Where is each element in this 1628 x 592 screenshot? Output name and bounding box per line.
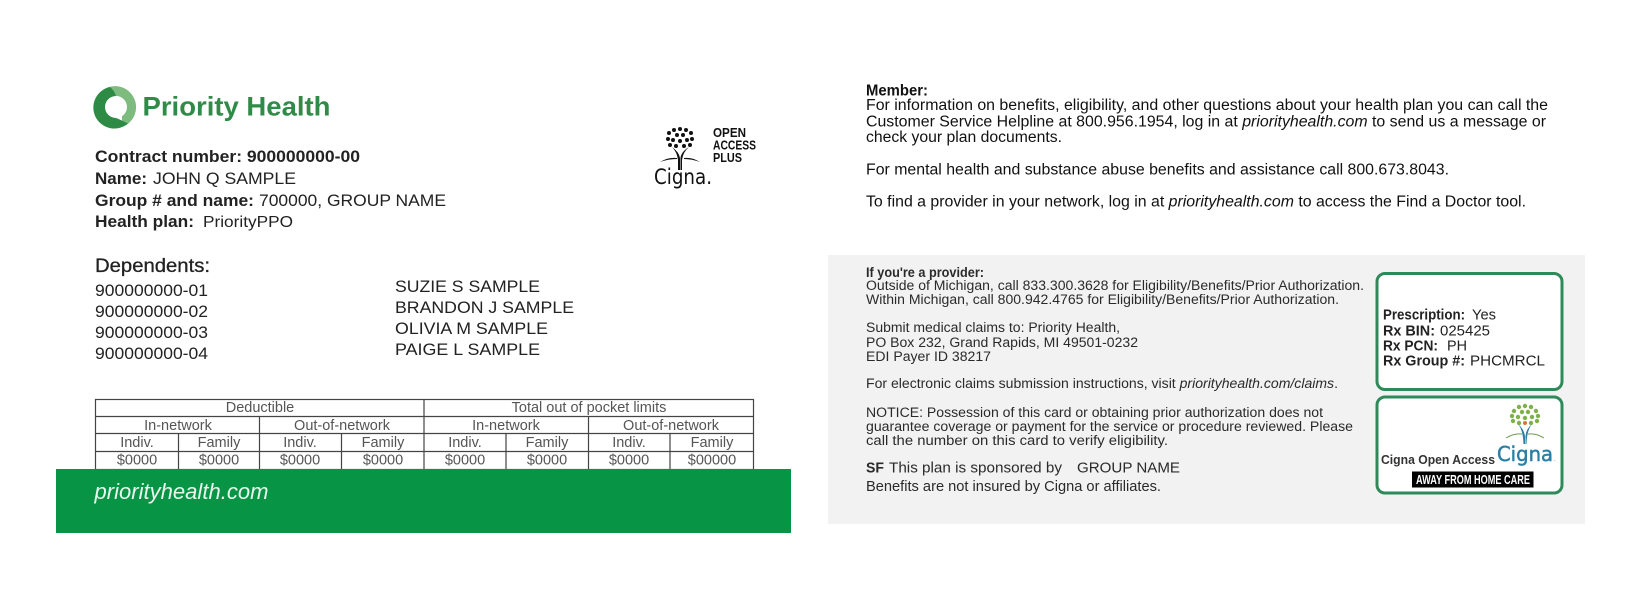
table: deductible and out of pocket limits: Family	[691, 435, 734, 451]
table: deductible and out of pocket limits: Deductible	[226, 400, 294, 416]
table: deductible and out of pocket limits: $0000	[199, 452, 239, 468]
label: away from home care	[1412, 472, 1534, 488]
table: deductible and out of pocket limits: Out-of-network	[623, 418, 720, 434]
label: away from home care: AWAY FROM HOME CARE	[1416, 472, 1530, 487]
table: deductible and out of pocket limits: $0000	[527, 452, 567, 468]
panel: Cigna Open Access box: .	[1554, 457, 1556, 463]
panel: prescription box: PHCMRCL	[1470, 354, 1545, 370]
member details: 700000, GROUP NAME	[259, 191, 446, 210]
table: deductible and out of pocket limits: $0000	[117, 452, 157, 468]
table: deductible and out of pocket limits: In-network	[472, 418, 541, 434]
panel: Cigna Open Access box: Cigna Open Access	[1381, 452, 1495, 467]
table: deductible and out of pocket limits: Indiv.	[448, 435, 482, 451]
panel: prescription box: Rx PCN:	[1383, 338, 1438, 354]
dependents list: 900000000-03	[95, 324, 208, 342]
logo: Priority Health	[93, 86, 330, 129]
member details: Group # and name:	[95, 191, 254, 210]
table: deductible and out of pocket limits: Indiv.	[283, 435, 317, 451]
table: deductible and out of pocket limits: $0000	[445, 452, 485, 468]
panel: prescription box: Rx Group #:	[1383, 354, 1465, 370]
dependents list: 900000000-02	[95, 303, 208, 321]
panel: provider information: call the number on this card to verify eligibility.	[866, 433, 1168, 448]
table: deductible and out of pocket limits: Indiv.	[612, 435, 646, 451]
icon: Cigna Open Access Plus logo: Cigna.	[654, 165, 712, 189]
panel: prescription box: PH	[1447, 338, 1467, 354]
dependents list: PAIGE L SAMPLE	[395, 341, 540, 359]
panel: provider information: If you're a provider:	[866, 265, 984, 280]
panel: provider information: SF	[866, 460, 884, 476]
icon: Cigna Open Access Plus logo: PLUS	[713, 151, 742, 165]
panel: prescription box: Prescription:	[1383, 308, 1465, 324]
panel: member information: check your plan documents.	[866, 129, 1062, 146]
table: deductible and out of pocket limits: Indiv.	[120, 435, 154, 451]
member details: Name:	[95, 169, 147, 188]
table: deductible and out of pocket limits: Family	[526, 435, 569, 451]
panel: provider information	[828, 255, 1585, 524]
icon: Cigna Open Access Plus logo	[654, 126, 756, 189]
panel: member information: Customer Service Helpline at 800.956.1954, log in at priorityhealth.com to send us a message or	[866, 114, 1546, 130]
table: deductible and out of pocket limits: Family	[198, 435, 241, 451]
dependents list: 900000000-04	[95, 345, 208, 363]
panel: prescription box: 025425	[1440, 324, 1490, 340]
table: deductible and out of pocket limits: $0000	[609, 452, 649, 468]
dependents list: Dependents:	[95, 256, 210, 277]
panel: card front	[56, 86, 791, 533]
panel: member information	[866, 82, 1548, 210]
panel: Cigna Open Access box: Cigna	[1497, 442, 1553, 466]
table: deductible and out of pocket limits: In-network	[144, 418, 213, 434]
panel: member information: Member:	[866, 82, 928, 100]
icon: Cigna tree	[660, 127, 700, 170]
table: deductible and out of pocket limits	[96, 400, 754, 470]
footer band: priorityhealth.com	[93, 479, 269, 504]
table: deductible and out of pocket limits: $00000	[688, 452, 736, 468]
panel: prescription box	[1377, 274, 1562, 390]
table: deductible and out of pocket limits: Total out of pocket limits	[512, 400, 666, 416]
panel: member information: For mental health and substance abuse benefits and assistance call 800.673.8043.	[866, 162, 1449, 178]
panel: provider information: Submit medical claims to: Priority Health,	[866, 320, 1120, 335]
member details: Contract number: 900000000-00	[95, 147, 360, 166]
dependents list	[95, 256, 574, 363]
panel: member information: For information on benefits, eligibility, and other questions about your health plan you can call the	[866, 97, 1548, 114]
panel: provider information: guarantee coverage or payment for the service or procedure reviewed. Please	[866, 419, 1353, 434]
panel: provider information: For electronic claims submission instructions, visit priorityhealth.com/claims .	[866, 376, 1338, 391]
footer band	[56, 469, 791, 533]
logo: Priority Health: Priority Health	[142, 92, 330, 122]
dependents list: OLIVIA M SAMPLE	[395, 320, 548, 338]
dependents list: SUZIE S SAMPLE	[395, 278, 540, 296]
icon: Cigna Open Access Plus logo: OPEN	[713, 126, 746, 140]
panel: provider information: GROUP NAME	[1077, 460, 1180, 476]
dependents list: 900000000-01	[95, 282, 208, 300]
panel: provider information: Within Michigan, call 800.942.4765 for Eligibility/Benefits/Prior Authorization.	[866, 292, 1339, 307]
member details: PriorityPPO	[203, 214, 293, 231]
panel: provider information: NOTICE: Possession of this card or obtaining prior authorization does not	[866, 405, 1323, 420]
panel: provider information: Outside of Michigan, call 833.300.3628 for Eligibility/Benefits/Prior Authorization.	[866, 278, 1364, 293]
table: deductible and out of pocket limits: $0000	[363, 452, 403, 468]
panel: Cigna Open Access box	[1377, 397, 1562, 493]
panel: provider information: PO Box 232, Grand Rapids, MI 49501-0232	[866, 335, 1138, 350]
member details: JOHN Q SAMPLE	[153, 169, 296, 188]
table: deductible and out of pocket limits: Out-of-network	[294, 418, 391, 434]
icon: Cigna tree, colour	[1506, 404, 1544, 444]
icon: Cigna Open Access Plus logo: ACCESS	[713, 138, 756, 152]
table: deductible and out of pocket limits: $0000	[280, 452, 320, 468]
panel: provider information: EDI Payer ID 38217	[866, 349, 991, 364]
table: deductible and out of pocket limits: Family	[362, 435, 405, 451]
member details	[95, 147, 446, 231]
panel: member information: To find a provider in your network, log in at priorityhealth.com to access the Find a Doctor tool.	[866, 194, 1526, 210]
member details: Health plan:	[95, 212, 194, 231]
panel: prescription box: Yes	[1472, 308, 1496, 324]
panel: provider information: Benefits are not insured by Cigna or affiliates.	[866, 479, 1161, 495]
panel: provider information: This plan is sponsored by	[889, 460, 1063, 476]
panel: prescription box: Rx BIN:	[1383, 324, 1435, 340]
dependents list: BRANDON J SAMPLE	[395, 299, 574, 317]
